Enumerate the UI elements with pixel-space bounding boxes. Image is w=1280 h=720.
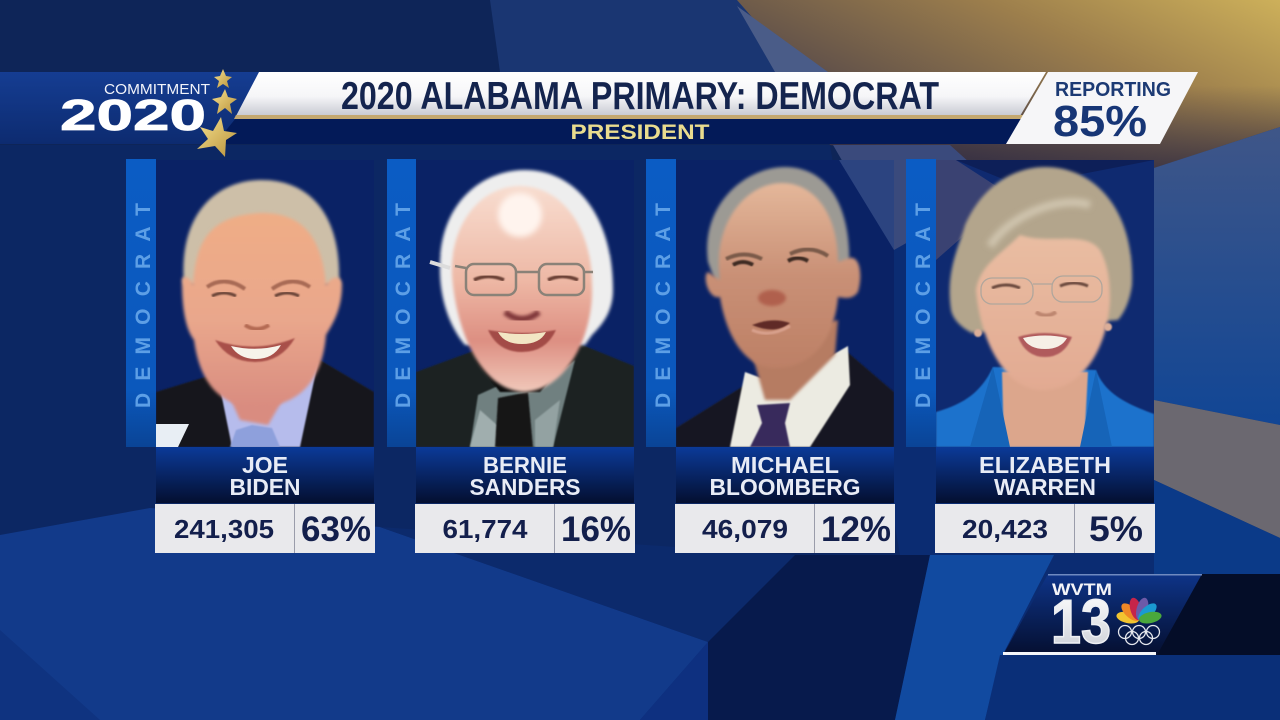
- vote count and percent: 16%: [561, 510, 631, 549]
- vote count and percent: [935, 504, 1155, 553]
- name plate: WARREN: [994, 474, 1096, 500]
- vote count and percent: 63%: [301, 510, 371, 549]
- reporting value: 85%: [1053, 97, 1147, 146]
- candidate panel: Elizabeth Warren: [906, 159, 1155, 553]
- watermark chip: [156, 424, 189, 447]
- vote count and percent: 61,774: [442, 514, 528, 544]
- candidate panel: Joe Biden: [126, 159, 375, 553]
- vote count and percent: [155, 504, 375, 553]
- vote count and percent: [675, 504, 895, 553]
- candidate panel: Michael Bloomberg: [646, 159, 895, 553]
- name plate: SANDERS: [470, 474, 580, 500]
- station name: WVTM: [1052, 580, 1112, 599]
- logo: Commitment 2020 with stars: [60, 69, 237, 157]
- name plate: [676, 447, 894, 503]
- name plate: [156, 447, 374, 503]
- name plate: ELIZABETH: [979, 452, 1111, 478]
- candidate panel: Bernie Sanders: [387, 159, 635, 553]
- photo: Bloomberg illustration: [676, 160, 894, 447]
- name plate: BIDEN: [230, 474, 300, 500]
- party strip: [387, 159, 416, 447]
- vote count and percent: 5%: [1089, 510, 1143, 549]
- vote count and percent: [415, 504, 635, 553]
- reporting box: [1006, 72, 1198, 146]
- party strip: [906, 159, 936, 447]
- icon: NBC peacock: [1115, 596, 1163, 625]
- photo: Warren illustration: [936, 160, 1154, 447]
- party strip: DEMOCRAT: [912, 203, 935, 408]
- photo: Sanders illustration: [416, 160, 634, 447]
- logo: Commitment 2020 with stars: 2020: [60, 91, 206, 140]
- party strip: [646, 159, 676, 447]
- title bar: [234, 72, 1046, 119]
- name plate: MICHAEL: [731, 452, 839, 478]
- name plate: JOE: [242, 452, 288, 478]
- photo: Biden illustration: [156, 160, 374, 447]
- name plate: BERNIE: [483, 452, 567, 478]
- vote count and percent: 241,305: [174, 514, 274, 544]
- party strip: [126, 159, 156, 447]
- station bug: WVTM 13 NBC: [1003, 574, 1280, 657]
- top banner band: [0, 72, 1022, 144]
- vote count and percent: 46,079: [702, 514, 788, 544]
- subtitle: President: PRESIDENT: [570, 121, 710, 144]
- vote count and percent: 12%: [821, 510, 891, 549]
- vote count and percent: 20,423: [962, 514, 1048, 544]
- name plate: [416, 447, 634, 503]
- party strip: DEMOCRAT: [652, 203, 675, 408]
- name plate: [936, 447, 1154, 503]
- party strip: DEMOCRAT: [392, 203, 415, 408]
- name plate: BLOOMBERG: [710, 474, 860, 500]
- icon: Olympic rings: [1118, 626, 1160, 644]
- title: 2020 ALABAMA PRIMARY: DEMOCRAT: [341, 75, 939, 118]
- reporting label: REPORTING: [1055, 79, 1171, 101]
- channel number: 13: [1051, 588, 1111, 657]
- party strip: DEMOCRAT: [132, 203, 155, 408]
- logo: Commitment 2020 with stars: COMMITMENT: [104, 81, 210, 98]
